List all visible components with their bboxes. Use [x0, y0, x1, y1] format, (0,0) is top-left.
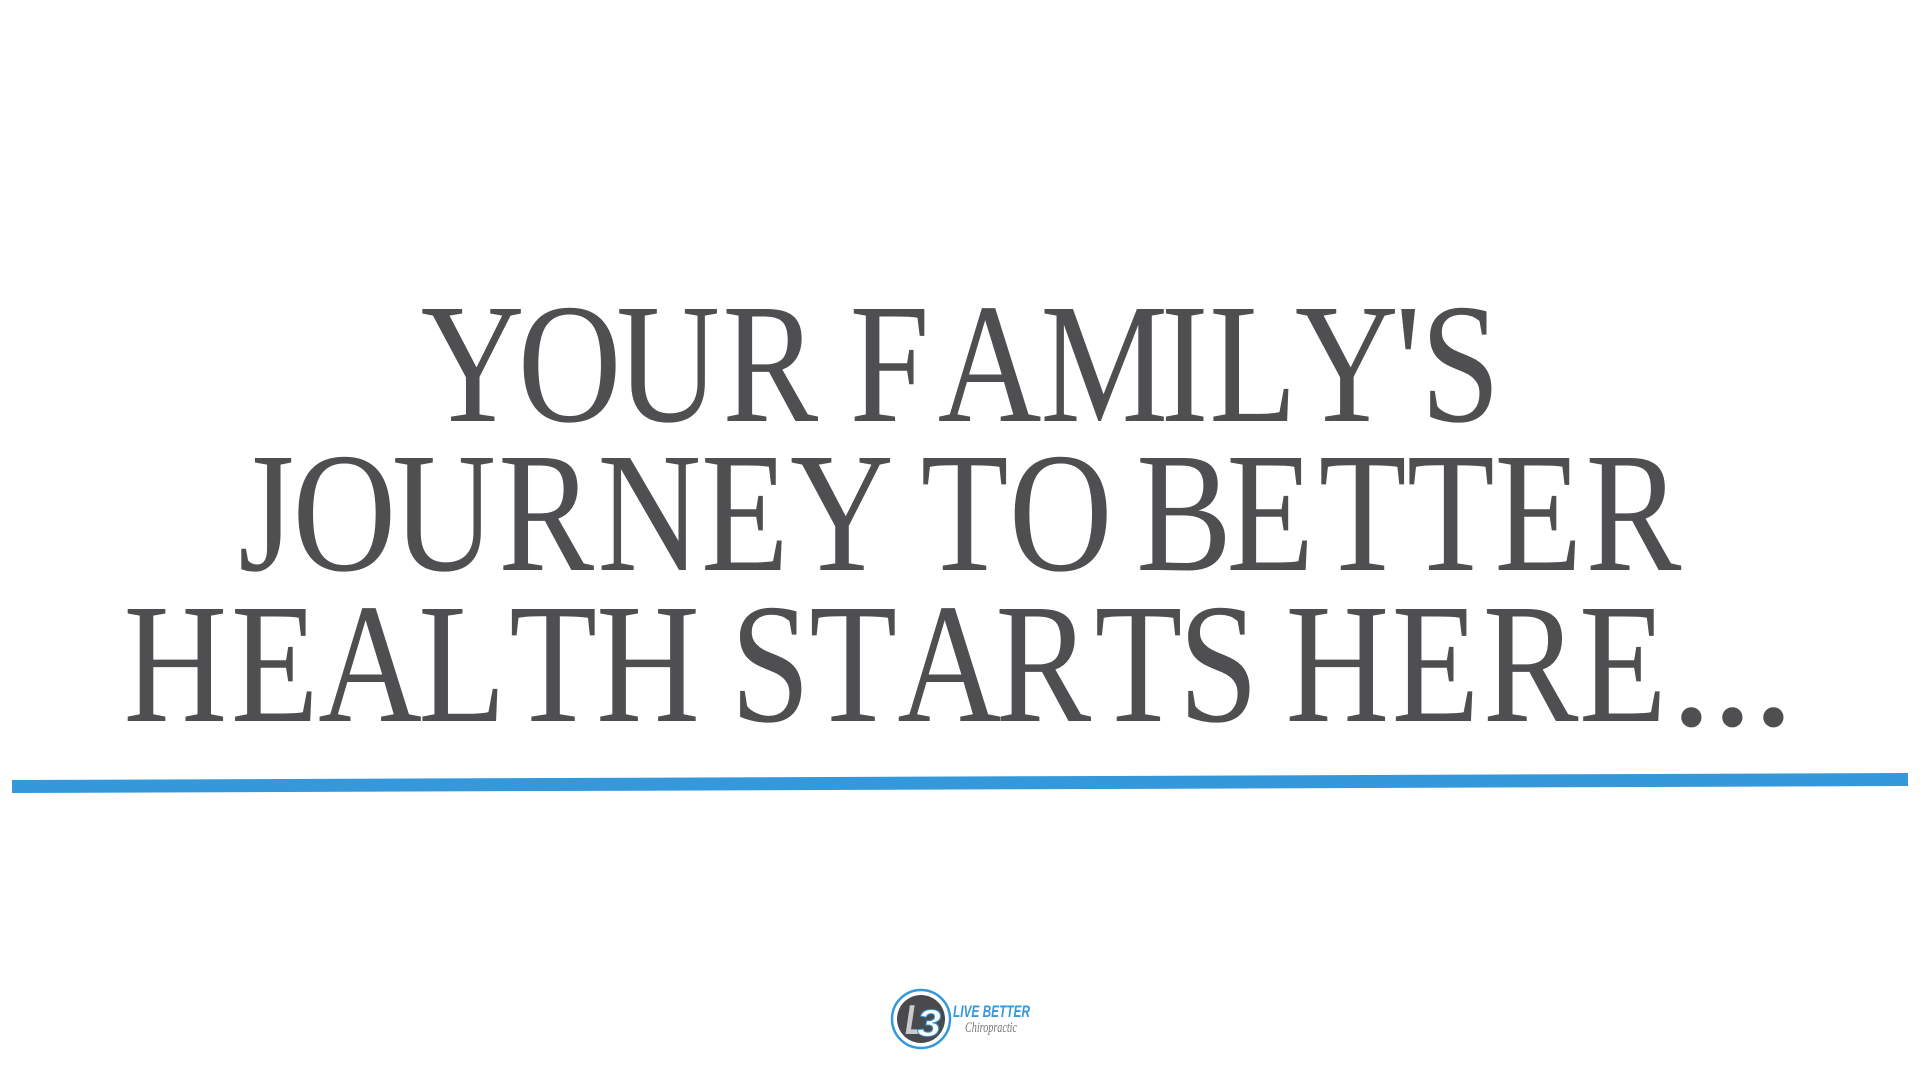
logo wordmark: LIVE BETTER [953, 1002, 1030, 1021]
logo script: Chiropractic [965, 1020, 1017, 1036]
title: TO [921, 418, 1113, 608]
title: BETTER [1136, 418, 1682, 608]
title: ... [1670, 573, 1795, 762]
title: HEALTH [124, 569, 700, 759]
icon: logo badge: L [905, 996, 925, 1043]
icon: logo badge [892, 990, 950, 1048]
title: STARTS [730, 569, 1258, 759]
title: HERE [1286, 569, 1667, 759]
title [124, 269, 1795, 762]
title: FAMILY'S [850, 269, 1500, 459]
logo: Live Better Chiropractic [892, 990, 1030, 1048]
blue divider line [12, 773, 1908, 793]
icon: logo badge: 3 [917, 1003, 941, 1045]
title: JOURNEY [238, 418, 894, 608]
title: YOUR [421, 269, 819, 459]
